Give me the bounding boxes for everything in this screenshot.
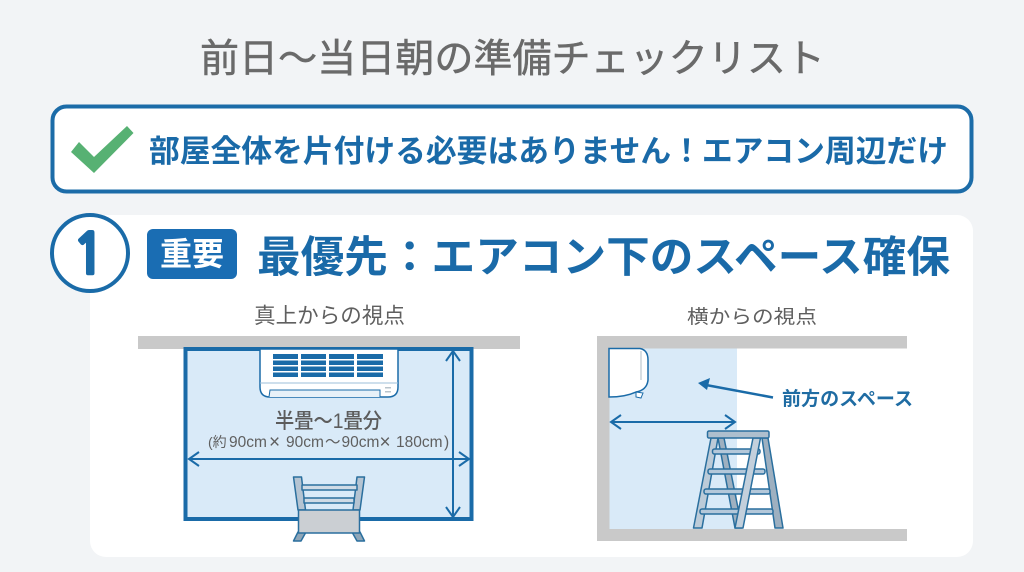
title: 前日〜当日朝の準備チェックリスト (200, 38, 825, 81)
heading: 最優先：エアコン下のスペース確保 (257, 234, 950, 282)
dimension text: 90cm (229, 434, 267, 451)
dimension text: 180cm (396, 434, 443, 451)
dimension text: ) (444, 434, 449, 451)
arrow: front width (611, 415, 735, 429)
icon: air conditioner side (609, 348, 648, 398)
room walls (597, 336, 907, 541)
wall (138, 336, 520, 349)
arrow: width (189, 452, 469, 466)
dimension text: (約 (208, 434, 227, 450)
dimension text: 〜 (325, 434, 341, 451)
callout banner (52, 106, 972, 192)
size text: 半畳〜1畳分 (275, 410, 382, 433)
space area (186, 349, 472, 519)
number badge (52, 215, 128, 291)
icon: stepladder side (694, 431, 783, 528)
arrow: pointing to space (698, 378, 773, 398)
icon: air conditioner (260, 349, 398, 397)
front space (610, 348, 737, 529)
panel: space requirement (90, 215, 973, 557)
diagram: side view (597, 306, 913, 541)
top view label: 真上からの視点 (254, 304, 405, 328)
front space label: 前方のスペース (782, 387, 913, 410)
label: important: 重要 (160, 236, 224, 272)
icon: green check mark (71, 126, 134, 173)
banner text: 部屋全体を片付ける必要はありません！エアコン周辺だけ (149, 134, 948, 169)
arrow: depth (446, 351, 460, 517)
number badge: 1 (72, 228, 106, 283)
side view label: 横からの視点 (687, 306, 817, 328)
dimension text: 90cm (286, 434, 324, 451)
label: important (147, 229, 237, 279)
dimension text: 90cm (342, 434, 379, 451)
dimension text: × (380, 432, 391, 453)
icon: stepladder from above (294, 477, 364, 541)
dimension text: × (269, 432, 280, 453)
diagram: top view (138, 304, 520, 541)
